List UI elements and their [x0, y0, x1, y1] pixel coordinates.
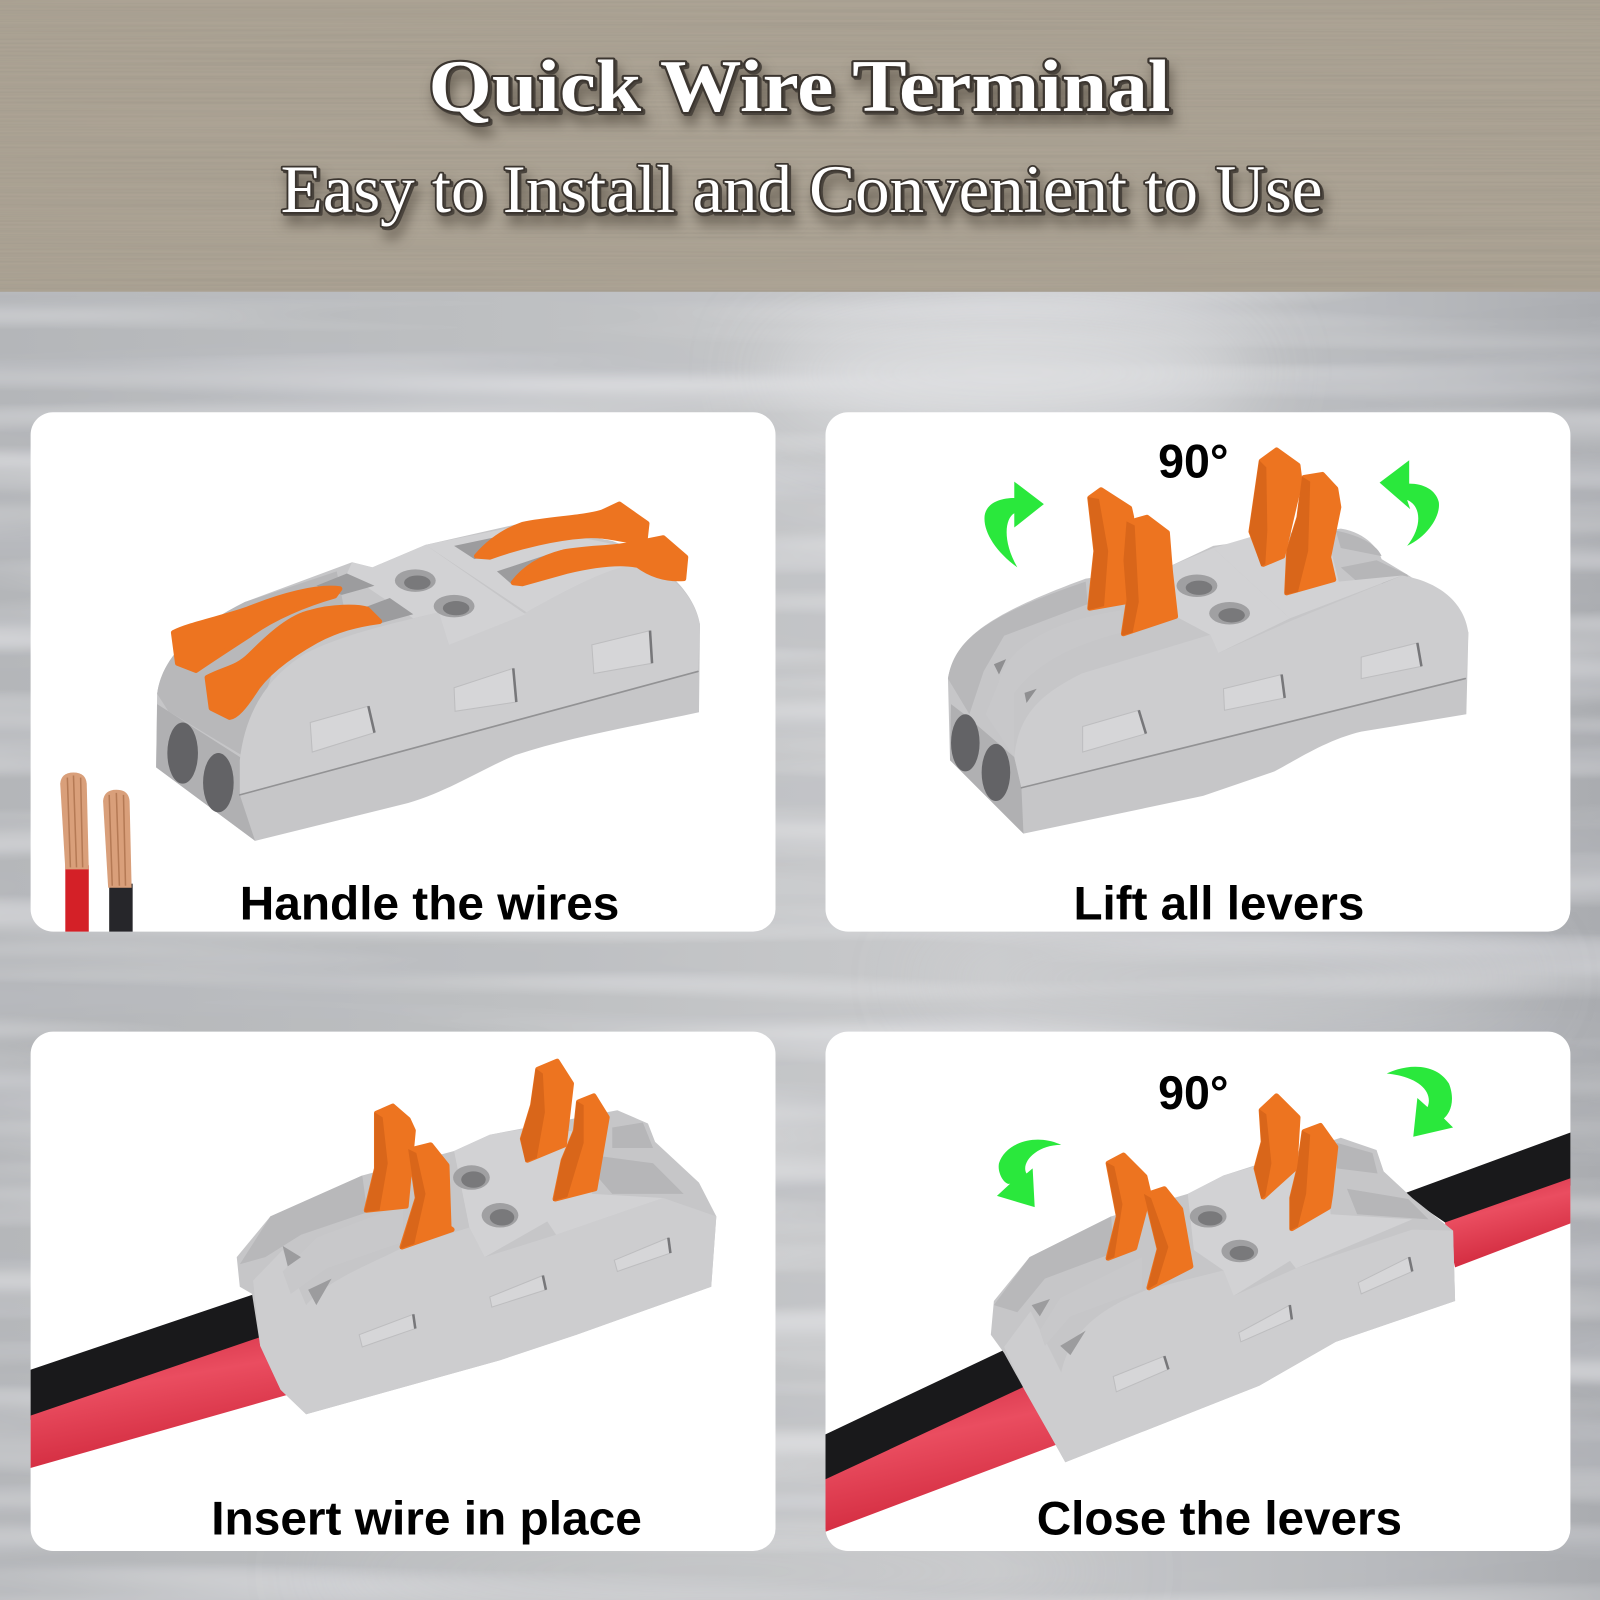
orange levers raised [364, 1061, 607, 1249]
orange levers raised [1088, 450, 1339, 636]
stripped red and black wires [60, 772, 133, 937]
orange levers flat [173, 504, 686, 717]
angle label: 90° [1158, 436, 1229, 488]
connector with levers raised [948, 450, 1468, 834]
wire entry holes [167, 722, 234, 812]
connector with wires [237, 1061, 716, 1414]
top test holes [1177, 574, 1250, 624]
wires through connector [820, 1131, 1576, 1534]
caption: Insert wire in place [211, 1493, 642, 1545]
top test holes [1190, 1205, 1258, 1262]
panel: handle the wires [31, 412, 776, 937]
wire entry holes [951, 714, 1010, 801]
panel: insert wire in place [26, 1032, 776, 1551]
top test holes [395, 569, 474, 617]
panel: lift all levers [826, 412, 1570, 932]
caption: Handle the wires [240, 877, 619, 929]
arrow: left closing [997, 1140, 1061, 1207]
side windows [310, 631, 652, 752]
caption: Close the levers [1037, 1493, 1402, 1545]
angle label: 90° [1158, 1067, 1229, 1119]
side windows [1083, 643, 1421, 752]
side windows [359, 1238, 670, 1347]
header band: brushed taupe [0, 0, 1600, 292]
top test holes [453, 1165, 518, 1228]
connector closing [991, 1096, 1455, 1462]
arrow: right lift [1380, 460, 1439, 546]
orange levers closing [1106, 1096, 1336, 1290]
inserted black and red wires [26, 1294, 298, 1469]
title: Quick Wire Terminal [429, 46, 1170, 128]
arrow: right closing [1387, 1067, 1453, 1137]
side windows [1113, 1257, 1412, 1392]
arrow: left lift [984, 482, 1044, 567]
caption: Lift all levers [1073, 877, 1364, 929]
connector with levers closed [156, 504, 700, 841]
subtitle: Easy to Install and Convenient to Use [281, 152, 1322, 227]
panel: close the levers [820, 1032, 1576, 1551]
